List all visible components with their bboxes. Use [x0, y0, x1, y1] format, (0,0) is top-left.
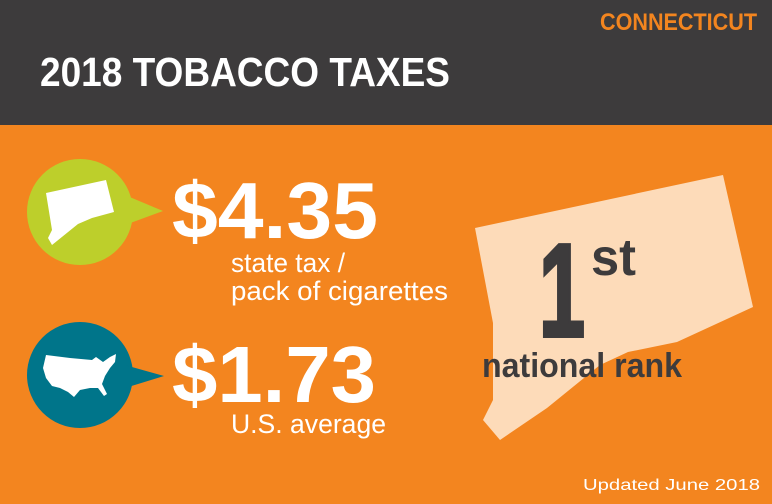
rank number: 1 — [539, 217, 585, 364]
state tax value — [172, 166, 448, 306]
US average value: $1.73 — [172, 330, 376, 419]
rank panel: state shape: st — [591, 229, 636, 287]
state label: CONNECTICUT — [600, 9, 757, 36]
title: 2018 TOBACCO TAXES — [40, 49, 450, 95]
icon: Connecticut bubble — [27, 159, 163, 265]
state tax value: state tax / — [231, 248, 345, 278]
US average value: U.S. average — [231, 409, 386, 439]
header band — [0, 0, 772, 125]
footer note: Updated June 2018 — [583, 477, 760, 494]
state tax value: pack of cigarettes — [231, 276, 448, 306]
icon: US bubble — [27, 322, 164, 428]
rank label: national rank — [482, 347, 682, 385]
state tax value: $4.35 — [172, 166, 378, 255]
rank panel: state shape — [475, 175, 753, 440]
